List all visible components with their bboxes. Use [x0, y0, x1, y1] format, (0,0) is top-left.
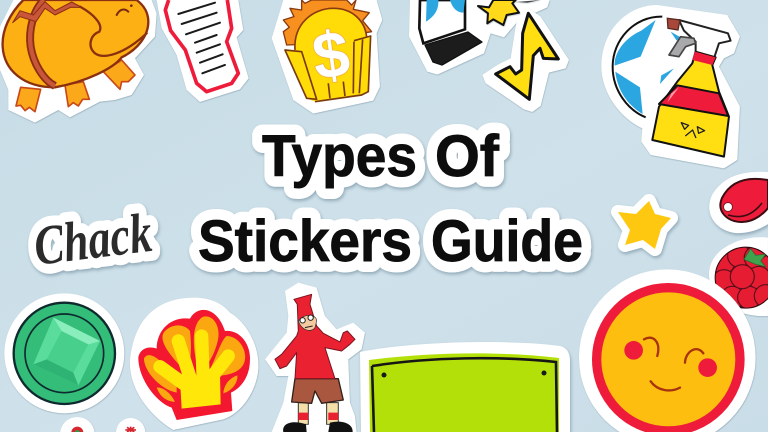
tiny sticker: bottom left dot: [60, 417, 95, 432]
sticker: red ketchup character: [265, 283, 365, 432]
title line 1: Of: [435, 124, 500, 189]
sticker: receipt: [157, 0, 249, 102]
bottle body: [652, 52, 729, 157]
title line 2: [198, 209, 583, 274]
sticker: blank lime label: [360, 342, 570, 432]
sticker: cherry blob: [709, 172, 768, 233]
title line 2: Stickers: [198, 209, 412, 274]
face: [298, 315, 317, 330]
title line 2: Guide: [431, 209, 583, 274]
sticker: shell: [130, 298, 258, 430]
title line 1: Types: [262, 124, 417, 189]
shorts: [292, 379, 343, 403]
title: [198, 124, 583, 274]
sticker: dollar cupcake: $: [308, 16, 354, 93]
globe: [613, 17, 681, 117]
sticker: spray bottle and globe: [601, 5, 740, 168]
sticker: laptop: [409, 0, 550, 75]
sticker: dollar cupcake: [272, 0, 382, 114]
sticker: raspberry: [709, 237, 768, 316]
tiny sticker: bottom red burst: [116, 418, 145, 432]
sticker: small yellow star: [478, 0, 541, 25]
sticker: orange bird: [0, 0, 157, 123]
sticker: green gem button: [4, 293, 124, 413]
title line 2: Guide: [431, 209, 583, 274]
title line 1: Types: [262, 124, 417, 189]
sticker: script word Chack: Chack: [31, 202, 155, 278]
sticker: yellow star: [618, 201, 671, 249]
title line 2: Stickers: [198, 209, 412, 274]
legs and shoes: [283, 403, 353, 432]
red body: [275, 294, 355, 379]
sticker: zigzag arrow: [482, 7, 569, 112]
spray nozzle: [667, 18, 731, 58]
title line 1: [262, 124, 500, 189]
title line 1: Of: [435, 124, 500, 189]
sticker: smiley face: [579, 269, 756, 432]
